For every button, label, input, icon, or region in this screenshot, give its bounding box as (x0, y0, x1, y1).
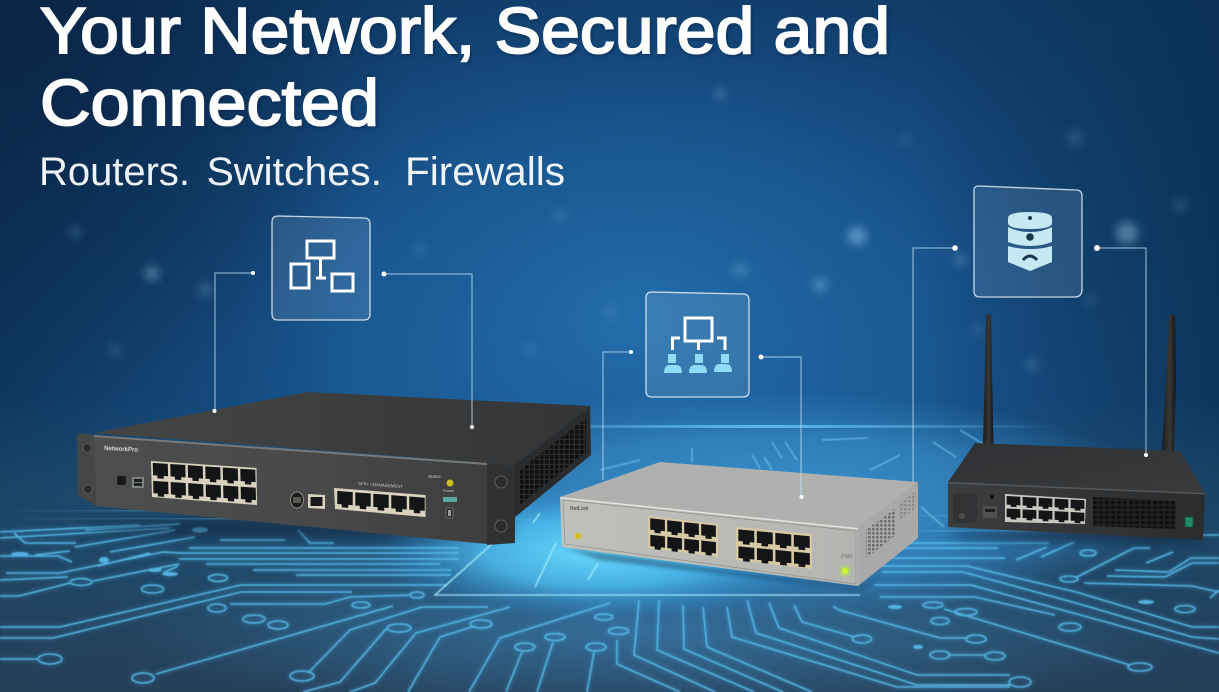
yellow indicator (575, 533, 581, 539)
port block 1 (151, 461, 257, 505)
status indicators (428, 474, 457, 518)
device: wireless router (948, 314, 1208, 542)
top face (94, 392, 590, 465)
small usb and console ports (117, 476, 144, 488)
brand label: NetLink (570, 506, 589, 512)
subtitle: Switches. (206, 150, 382, 194)
bokeh particles (71, 89, 1185, 371)
left ear (77, 433, 96, 506)
power label: PWR (841, 554, 853, 560)
front face (948, 482, 1205, 540)
vented side (858, 482, 918, 586)
icon panel: firewalls (974, 186, 1082, 297)
title (40, 0, 892, 141)
console round port (290, 492, 304, 508)
title text: Connected (40, 66, 379, 139)
front face (94, 435, 487, 544)
front face (560, 497, 858, 586)
green power led (839, 565, 851, 577)
top face (560, 462, 918, 528)
icon panel: routers (272, 216, 370, 320)
glowing horizon lines (0, 425, 1219, 532)
status indicators: Power (443, 488, 455, 493)
router port block (1005, 494, 1086, 524)
icon: database shield (1008, 212, 1052, 271)
subtitle: Firewalls (405, 150, 565, 194)
right ear (487, 463, 515, 545)
green switch (1185, 517, 1193, 527)
connector lines (215, 248, 1146, 497)
subtitle: Routers. (39, 150, 190, 194)
ports and switches (953, 493, 997, 523)
status indicators: Status (428, 474, 442, 479)
icon: hierarchy with users (664, 318, 732, 373)
antenna right (1162, 314, 1176, 451)
top face (948, 443, 1205, 493)
antenna left (983, 314, 994, 444)
vented side (515, 406, 591, 517)
connector dots (212, 245, 1148, 499)
switch port block 2 (736, 527, 812, 569)
icon: network diagram (291, 241, 353, 291)
hex vent (1093, 497, 1176, 529)
icon panel: switches (646, 292, 749, 397)
device: silver switch (560, 462, 918, 590)
circuit board traces (0, 430, 1219, 692)
switch port block 1 (648, 516, 718, 557)
port block label: SFP+ / MANAGEMENT (358, 481, 403, 489)
device: rack router (77, 392, 591, 545)
port block 2 (334, 488, 426, 517)
title shadow: Connected (42, 68, 382, 141)
brand label: NetworkPro (104, 445, 138, 454)
single port (308, 494, 325, 509)
